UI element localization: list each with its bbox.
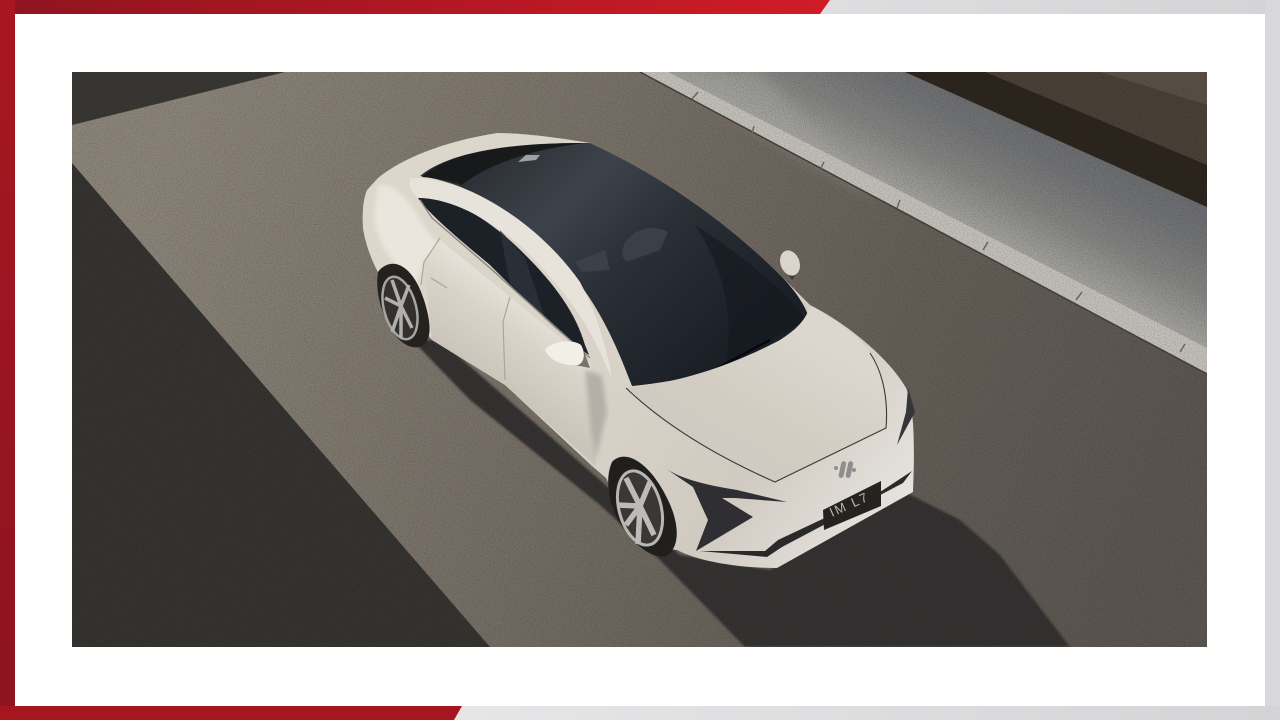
plate text: IM L7 [827,490,870,520]
sidewalk [665,72,1207,350]
frame: top bar [0,0,1280,14]
car body [363,133,914,568]
dark rear glass band [422,143,585,185]
sidewalk left sun patch [724,74,863,192]
roof pillar strip [409,178,612,378]
windshield wiper [710,340,770,372]
door window trim [420,200,590,358]
panoramic glass roof [420,143,809,386]
bottom-left shadow [72,163,490,647]
far mirror [777,248,803,280]
hood [626,306,888,482]
door panels [424,240,596,466]
right headlight strip [897,388,915,445]
lower bumper intake [700,471,912,557]
brand logo [834,461,856,478]
curb [640,72,1207,374]
car [363,133,915,568]
asphalt grain [72,72,1207,647]
fender shade [585,370,607,460]
door shut lines [421,238,510,380]
rear wheel [376,264,430,347]
road surface [72,72,1207,647]
hood shut line [626,353,887,482]
side window [418,198,589,355]
licence plate [823,481,881,530]
car shadow [412,340,1070,647]
frame: bottom bar [0,706,1280,720]
near mirror [545,341,590,368]
wall behind sidewalk [905,72,1207,207]
left headlight [665,468,787,551]
frame: right bar [1265,0,1280,720]
shark fin antenna [518,155,540,162]
frame: left bar [0,0,15,720]
rear haunch highlight [374,185,440,285]
cabin seen through glass [575,228,668,272]
top-left shadow [72,72,285,125]
front wheel [608,457,677,557]
photo [72,72,1207,647]
